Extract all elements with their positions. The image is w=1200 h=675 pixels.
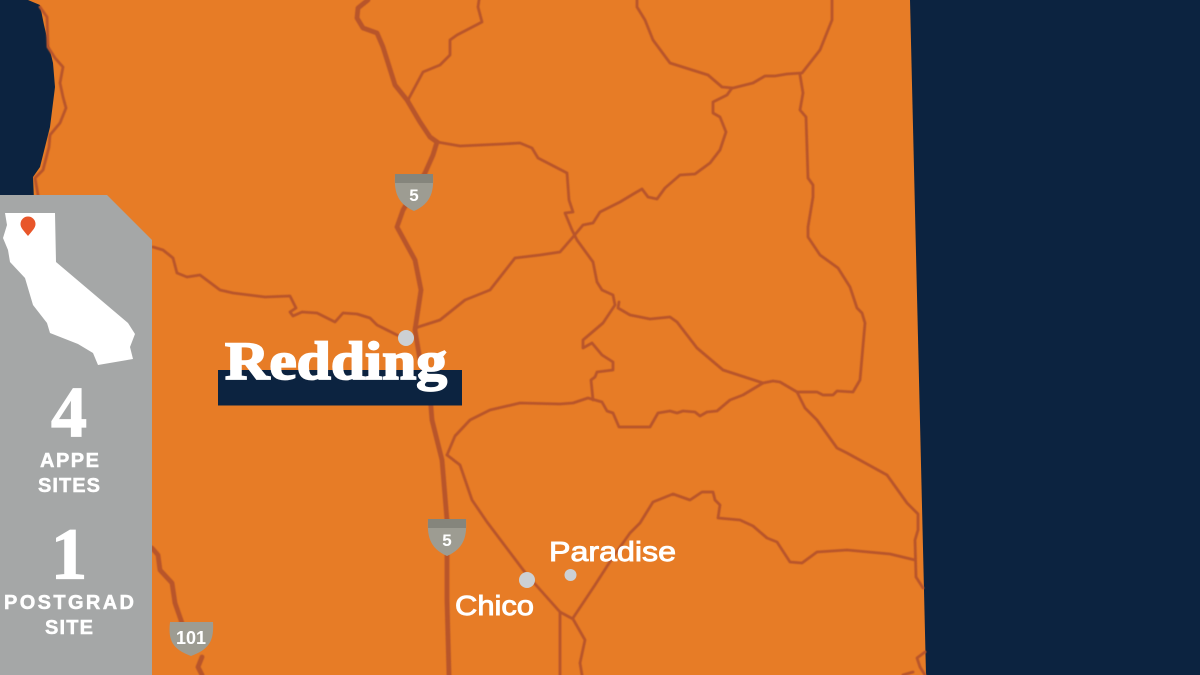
Redding label bar <box>218 370 462 406</box>
Chico location dot <box>519 572 535 588</box>
stat label: postgrad site: SITE <box>45 617 93 639</box>
stat label: postgrad site <box>4 592 134 639</box>
Chico label: Chico <box>455 590 534 621</box>
highway shield: I-5 south <box>428 519 466 556</box>
highway shield: I-5 north: 5 <box>409 186 419 205</box>
icon: location pin <box>20 217 36 236</box>
stat number: 4: 4 <box>51 372 87 452</box>
stat label: APPE sites <box>38 450 100 497</box>
stat label: APPE sites: SITES <box>38 475 100 497</box>
highways <box>152 0 449 675</box>
highway shield: 101: 101 <box>176 628 206 648</box>
stat number: 1: 1 <box>51 514 87 594</box>
stat label: APPE sites: APPE <box>40 450 99 472</box>
icon: California state silhouette <box>3 213 135 365</box>
highway shield: 101 <box>170 622 213 656</box>
stat label: postgrad site: POSTGRAD <box>4 592 134 614</box>
Paradise location dot <box>564 569 576 581</box>
Paradise label: Paradise <box>549 536 676 567</box>
navy area east of the state border <box>910 0 1200 675</box>
secondary roads <box>35 0 925 675</box>
Redding location dot <box>398 330 414 346</box>
highway shield: I-5 south: 5 <box>442 531 452 550</box>
Redding label: Redding <box>225 331 447 391</box>
panel: site counts <box>0 195 152 675</box>
ocean on the west coast <box>0 0 55 200</box>
highway shield: I-5 north <box>395 174 433 211</box>
